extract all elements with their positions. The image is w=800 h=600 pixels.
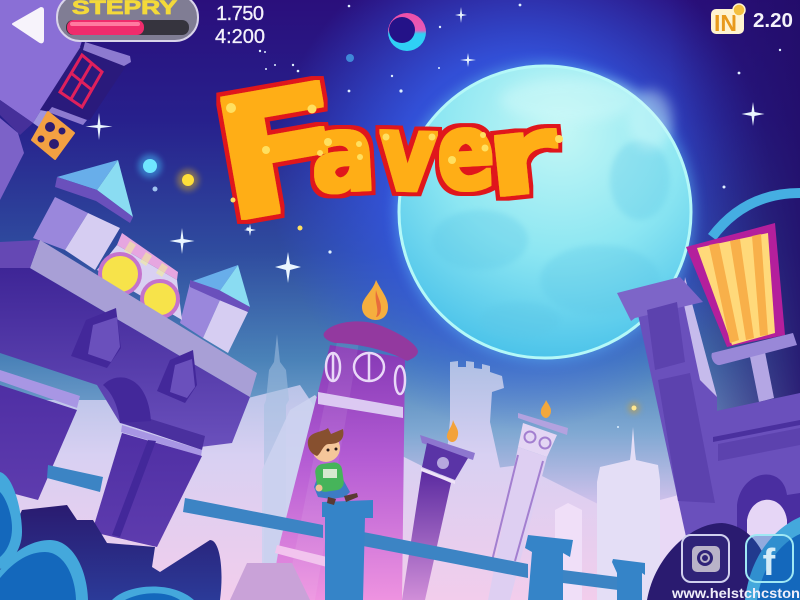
lamp xyxy=(686,223,797,402)
bottom right clouds xyxy=(647,517,800,600)
facebook icon xyxy=(746,535,793,584)
sparkle stars xyxy=(86,7,764,283)
blue arc xyxy=(712,193,800,237)
fence posts xyxy=(322,500,645,600)
back arrow xyxy=(13,8,43,42)
bottom left clouds xyxy=(0,472,310,600)
central purple tower xyxy=(270,342,405,600)
title: v xyxy=(377,91,439,216)
left castle turrets xyxy=(33,160,250,353)
central flame xyxy=(362,280,388,320)
instagram icon xyxy=(682,535,729,582)
full moon xyxy=(395,62,695,362)
title: a xyxy=(308,91,378,217)
tower capital xyxy=(324,321,418,361)
step progress bar xyxy=(57,0,198,41)
coin badge xyxy=(711,4,745,36)
glowing orbs xyxy=(138,54,640,414)
tall pale pillar right xyxy=(488,400,568,600)
coin badge: IN xyxy=(714,10,737,36)
orange window xyxy=(32,112,74,159)
stars xyxy=(152,4,781,428)
boy character xyxy=(308,428,358,505)
right building xyxy=(617,277,800,600)
title: r xyxy=(480,91,564,221)
fence rails xyxy=(47,465,618,590)
left castle structure xyxy=(0,240,257,547)
score readout xyxy=(215,3,265,48)
small pillar left xyxy=(402,420,475,600)
distant city silhouettes xyxy=(0,334,740,600)
title xyxy=(199,48,564,260)
crescent moon icon xyxy=(388,13,426,51)
score readout: 4:200 xyxy=(215,26,265,48)
arch under castle xyxy=(103,377,151,423)
title: F xyxy=(199,48,361,260)
facebook icon: f xyxy=(763,542,776,584)
castle windows xyxy=(97,233,182,320)
title: e xyxy=(434,89,497,215)
score readout: 1.750 xyxy=(216,3,264,25)
left top wall xyxy=(0,0,131,200)
timer value: 2.20 xyxy=(753,10,793,32)
